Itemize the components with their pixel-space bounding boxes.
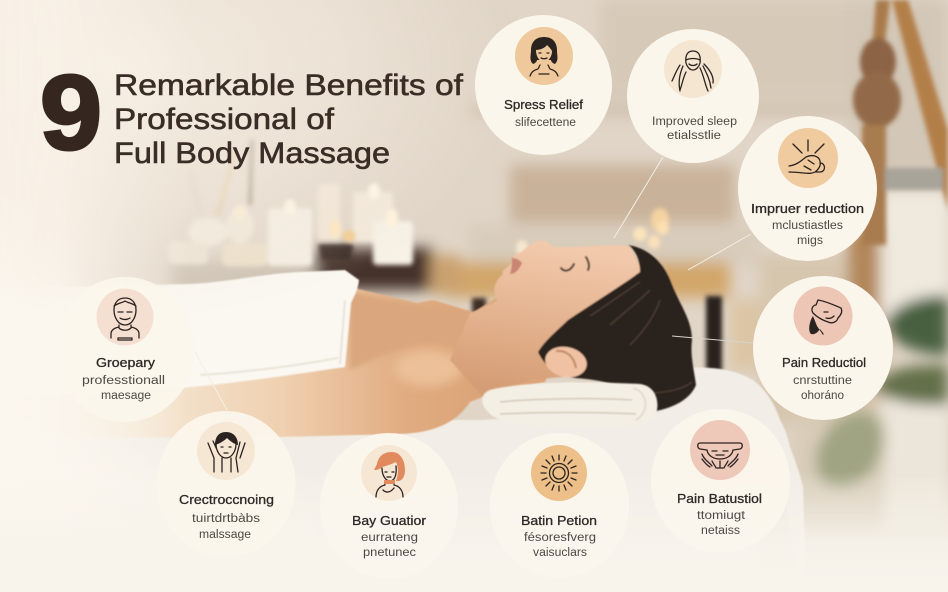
lips <box>510 258 522 274</box>
benefit: Imprver reduction: mclustiastles <box>772 220 843 232</box>
benefit: Crectroccnoing: malssage <box>199 529 251 541</box>
inner ear <box>556 351 576 368</box>
benefit: Pain Batustiol: ttomiugt <box>697 510 746 522</box>
chest shading <box>350 292 495 375</box>
title text: Professional of <box>114 103 335 136</box>
shoulder highlight <box>394 350 462 386</box>
benefit: Bay Guatior: pnetunec <box>363 547 416 559</box>
title block <box>40 54 464 172</box>
benefit: Crectroccnoing: Crectroccnoing <box>179 492 274 507</box>
benefit: Crectroccnoing: tuirtdrtbàbs <box>192 513 260 525</box>
candle flames <box>234 183 669 256</box>
benefit: Bay Guatior: Bay Guatior <box>352 513 427 528</box>
benefit: Bay Guatior: eurrateng <box>361 532 418 544</box>
ear <box>542 343 590 381</box>
benefit: Crectroccnoing <box>156 411 296 557</box>
closed eye and brow <box>561 257 589 271</box>
benefit: Spress Relief: slifecettene <box>515 117 576 129</box>
benefit: Imprver reduction <box>738 116 877 261</box>
body skin <box>30 287 565 438</box>
benefit: Pain Batustiol: Pain Batustiol <box>677 491 762 506</box>
benefit: Pain Reductiol <box>753 276 893 420</box>
towel texture <box>200 300 345 375</box>
face and neck <box>450 240 642 396</box>
benefit: Pain Batustiol <box>651 409 790 553</box>
benefit: Pain Reductiol: ohoráno <box>801 390 844 402</box>
icon: sun <box>541 455 577 491</box>
benefit: Batin Petion: vaisuclars <box>533 547 587 559</box>
hair strands <box>590 282 692 395</box>
towel <box>20 270 359 397</box>
benefit: Bay Guatior <box>320 433 458 579</box>
rolled towel under head <box>482 382 657 426</box>
benefit: Pain Batustiol: netaiss <box>701 525 740 537</box>
title text: Remarkable Benefits of <box>114 69 464 102</box>
benefit: Batin Petion: fésoresfverg <box>524 532 596 544</box>
person lying on the table <box>20 240 696 438</box>
icon: fist with rays <box>789 140 824 173</box>
hair <box>538 245 696 411</box>
benefit: Improved sleep: Improved sleep <box>652 116 737 128</box>
benefit: Batin Petion: Batin Petion <box>521 513 597 528</box>
benefit: Spress Relief <box>475 15 612 155</box>
benefit: Groepary: Groepary <box>96 355 156 370</box>
benefit: Batin Petion <box>490 433 629 578</box>
title text <box>114 69 464 170</box>
benefit: Pain Reductiol: cnrstuttine <box>793 375 852 387</box>
big number 9: 9 <box>40 54 102 172</box>
benefit: Groepary: professtionall <box>82 375 165 387</box>
benefit: Pain Reductiol: Pain Reductiol <box>782 355 866 370</box>
benefit: Improved sleep <box>627 29 759 163</box>
icon: woman portrait <box>530 37 558 76</box>
icon: person relaxing arms behind head <box>698 443 742 468</box>
benefit: Spress Relief: Spress Relief <box>504 97 583 112</box>
wooden stand <box>472 0 948 372</box>
massage table <box>0 368 806 592</box>
icon: face held by hands <box>672 51 713 91</box>
candles and jars <box>168 140 413 266</box>
benefit: Improved sleep: etialsstlie <box>667 130 721 142</box>
connector lines <box>195 157 753 410</box>
benefit: Groepary <box>56 277 194 422</box>
icon: red-haired woman <box>374 452 405 497</box>
benefit: Groepary: maesage <box>101 390 151 402</box>
benefit: Imprver reduction: Impruer reduction <box>751 201 864 216</box>
icon: person touching face <box>208 432 245 472</box>
title text: Full Body Massage <box>114 137 390 170</box>
icon: reclining head <box>809 300 842 335</box>
icon: man portrait <box>111 298 139 340</box>
benefit: Imprver reduction: migs <box>797 235 823 247</box>
